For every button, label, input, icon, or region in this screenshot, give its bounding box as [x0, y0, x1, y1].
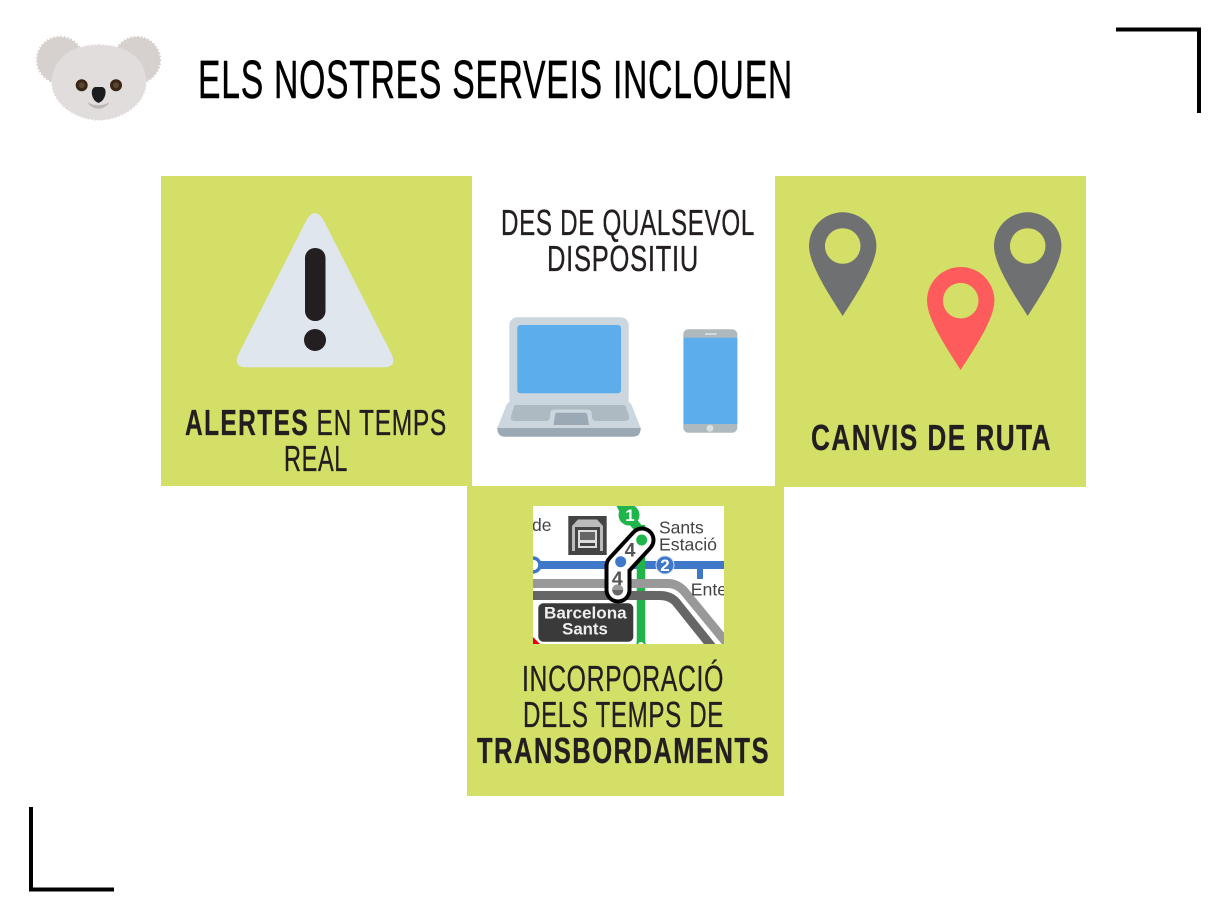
title: ELS NOSTRES SERVEIS INCLOUEN	[198, 50, 793, 110]
panel text: real: REAL	[284, 438, 348, 479]
corner bracket: bottom left	[31, 807, 114, 890]
metro map: de	[532, 515, 551, 535]
metro map: 1	[625, 506, 635, 525]
icon: smartphone	[683, 329, 737, 433]
heading: des de qualsevol dispositiu: DES DE QUALSEVOL	[501, 202, 755, 243]
panel: canvis de ruta	[775, 176, 1086, 487]
panel text: alertes: ALERTES EN TEMPS	[185, 402, 447, 443]
icon: grey map pin right	[994, 212, 1061, 316]
panel text: transbordaments: TRANSBORDAMENTS	[477, 730, 770, 771]
panel text: incorporació: INCORPORACIÓ	[522, 658, 724, 699]
heading: des de qualsevol dispositiu: DISPOSITIU	[547, 238, 699, 279]
icon: grey map pin left	[809, 212, 876, 316]
panel text: dels temps de: DELS TEMPS DE	[523, 694, 724, 735]
corner bracket: top right	[1116, 30, 1199, 113]
metro map: Sants	[562, 619, 608, 638]
metro map: Ente	[691, 580, 727, 600]
metro map: 2	[660, 556, 670, 575]
icon: red map pin	[927, 267, 994, 370]
icon: laptop	[497, 317, 641, 437]
icon: koala head	[37, 37, 160, 120]
metro map: 4	[612, 568, 623, 590]
metro map	[533, 506, 724, 644]
panel text: canvis de ruta: CANVIS DE RUTA	[811, 417, 1052, 458]
metro map: Estació	[659, 535, 717, 555]
metro map: Sants	[659, 517, 704, 537]
metro map: Barcelona	[544, 604, 628, 622]
icon: warning triangle	[237, 213, 393, 367]
panel: alertes en temps real	[161, 176, 472, 486]
heading: des de qualsevol dispositiu	[501, 202, 755, 279]
metro map: 4	[625, 540, 636, 562]
panel: transbordaments	[467, 486, 784, 796]
